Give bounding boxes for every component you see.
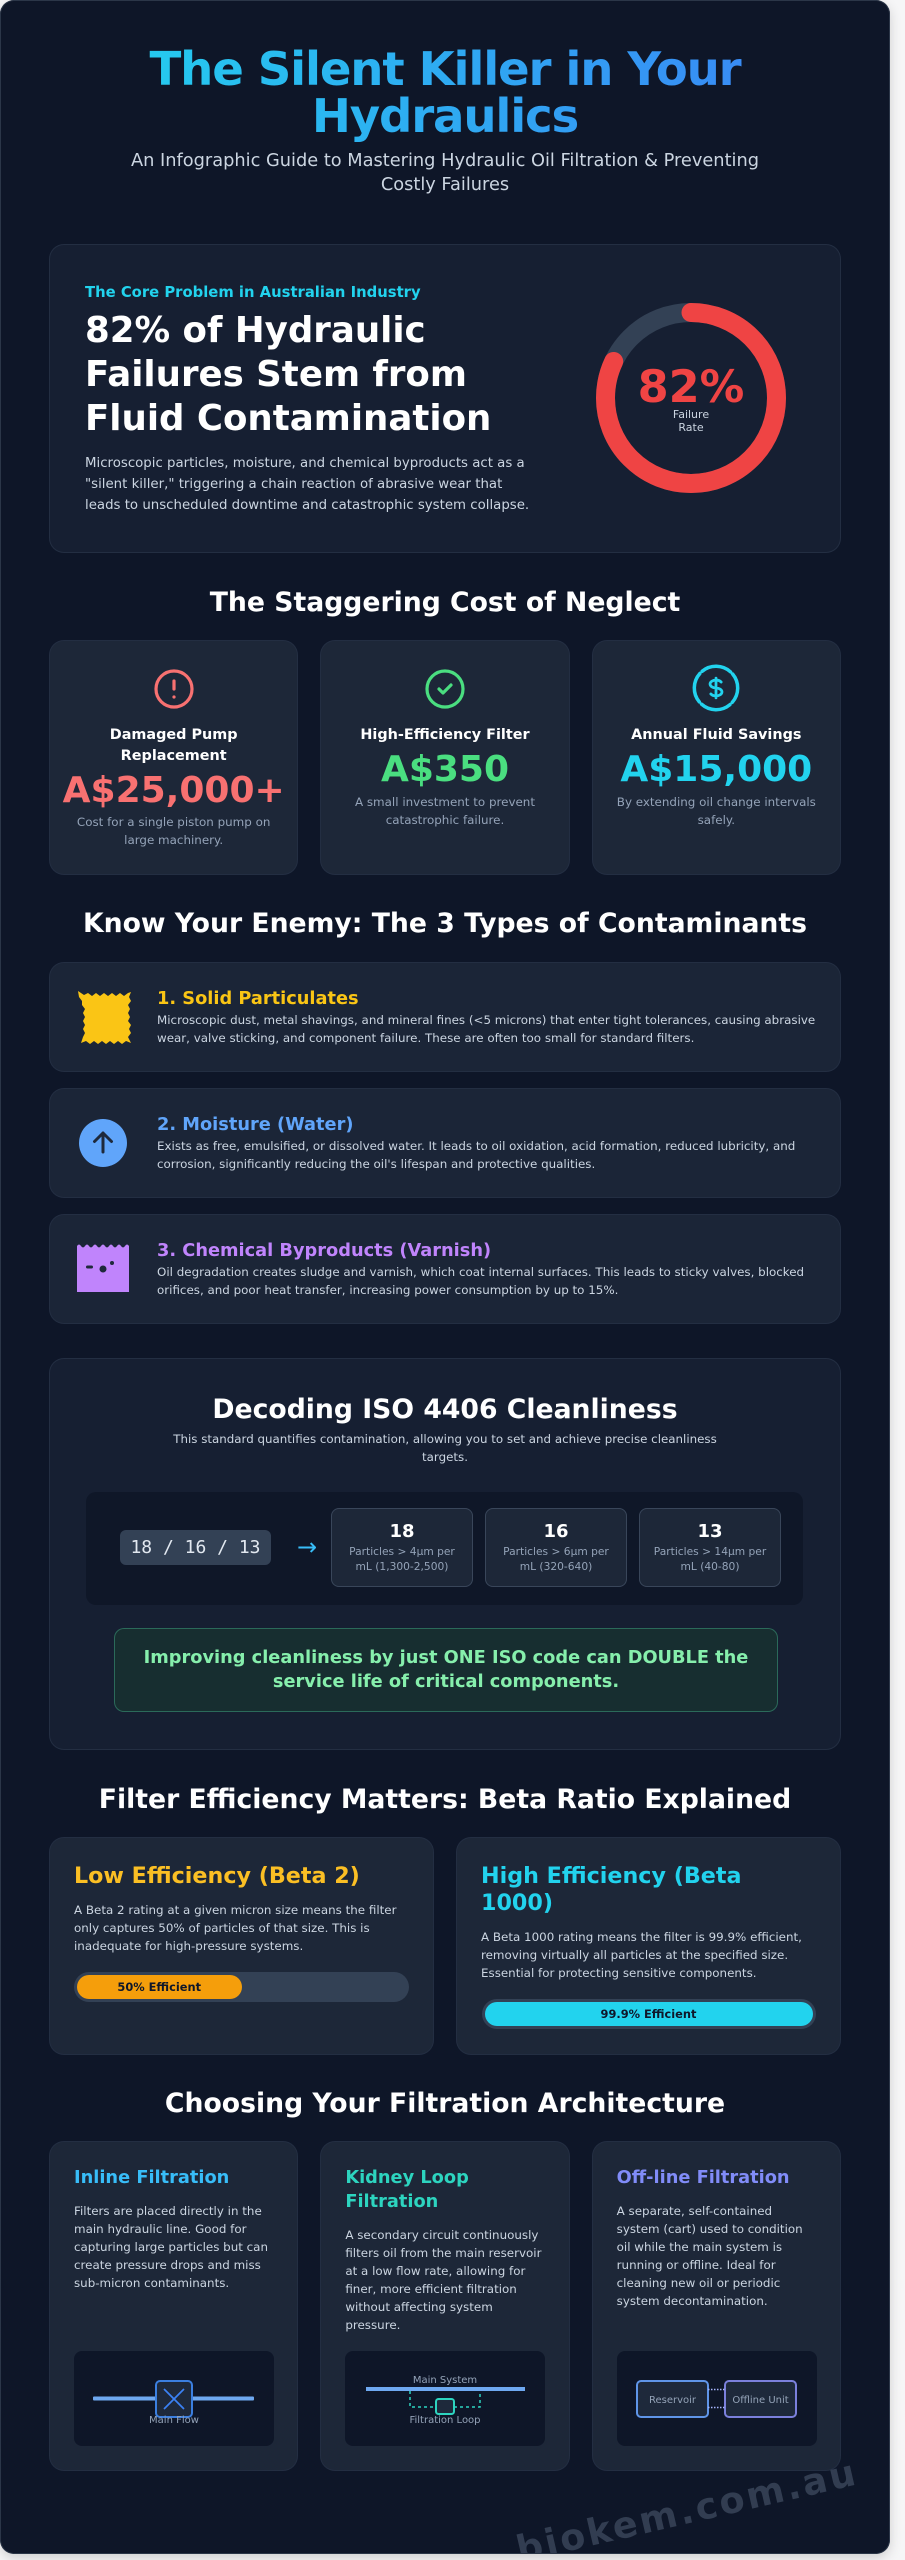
code 18 — [331, 1508, 473, 1587]
card text: cleaning new oil or periodic — [617, 2276, 780, 2290]
item text — [157, 1139, 795, 1171]
label — [349, 1545, 455, 1573]
note — [77, 815, 270, 847]
headline: Fluid Contamination — [85, 398, 491, 439]
label — [654, 1545, 766, 1573]
card text: create pressure drops and miss — [74, 2258, 261, 2272]
card title: Low Efficiency (Beta 2) — [74, 1863, 360, 1889]
panel: kidney loop filtration — [321, 2142, 569, 2470]
note: A small investment to prevent — [355, 795, 535, 809]
heading: Decoding ISO 4406 Cleanliness — [212, 1394, 678, 1425]
number: 16 — [543, 1521, 569, 1542]
code breakdown — [86, 1492, 803, 1605]
description — [85, 456, 529, 513]
card text: A Beta 1000 rating means the filter is 99.9% efficient, — [481, 1930, 802, 1944]
diagram: inline: Main Flow — [149, 2415, 198, 2426]
panel: low efficiency — [50, 1838, 433, 2054]
card text: system (cart) used to condition — [617, 2222, 803, 2236]
value: A$25,000+ — [63, 770, 285, 811]
arrow: → — [297, 1533, 317, 1561]
icon: warning — [154, 669, 194, 709]
heading: beta ratio: Filter Efficiency Matters: Beta Ratio Explained — [99, 1784, 791, 1815]
heading: cost of neglect: The Staggering Cost of Neglect — [210, 587, 680, 618]
item text: wear, valve sticking, and component failure. These are often too small for standard filters. — [157, 1031, 694, 1045]
card text: system decontamination. — [617, 2294, 768, 2308]
diagram: kidney loop: Filtration Loop — [410, 2415, 481, 2426]
note — [355, 795, 535, 827]
card text — [481, 1930, 802, 1980]
card text: only captures 50% of particles of that size. This is — [74, 1921, 370, 1935]
progress bar 99.9% — [482, 1999, 816, 2029]
eyebrow heading: The Core Problem in Australian Industry — [85, 284, 421, 301]
card text — [74, 1903, 396, 1953]
title: The Silent Killer in Your — [149, 43, 740, 97]
card title: High Efficiency (Beta — [481, 1863, 741, 1889]
label: Particles > 14µm per — [654, 1545, 766, 1558]
icon: water — [79, 1119, 127, 1167]
code pill — [120, 1530, 271, 1565]
note: Cost for a single piston pump on — [77, 815, 270, 829]
title: Hydraulics — [312, 90, 578, 144]
item text: orifices, and poor heat transfer, increasing power consumption by up to 15%. — [157, 1283, 618, 1297]
card title — [481, 1863, 741, 1916]
intro text: This standard quantifies contamination, allowing you to set and achieve precise cleanliness — [173, 1432, 717, 1446]
note: By extending oil change intervals — [617, 795, 816, 809]
card title: High-Efficiency Filter — [360, 727, 530, 743]
subtitle: An Infographic Guide to Mastering Hydraulic Oil Filtration & Preventing — [131, 150, 759, 171]
card title: Kidney Loop — [345, 2167, 469, 2188]
item text: corrosion, significantly reducing the oil's lifespan and protective qualities. — [157, 1157, 595, 1171]
label — [503, 1545, 609, 1573]
code pill: 18 / 16 / 13 — [130, 1537, 261, 1558]
label: mL (1,300-2,500) — [356, 1560, 448, 1573]
item text — [157, 1265, 804, 1297]
card title: Inline Filtration — [74, 2167, 229, 2188]
diagram: off-line: Reservoir — [649, 2395, 697, 2406]
note: large machinery. — [124, 833, 223, 847]
panel: ISO 4406 — [50, 1359, 840, 1749]
panel: solid particulates — [50, 963, 840, 1071]
card title: Damaged Pump — [110, 727, 238, 743]
value: A$350 — [381, 749, 509, 790]
card text: at a low flow rate, allowing for — [345, 2264, 525, 2278]
value: A$15,000 — [620, 749, 812, 790]
label: Particles > 6µm per — [503, 1545, 609, 1558]
donut chart: 82% failure rate: 82% — [638, 361, 744, 413]
intro text: targets. — [422, 1450, 468, 1464]
card text: without affecting system — [345, 2300, 493, 2314]
card title: 1000) — [481, 1890, 553, 1916]
label: mL (320-640) — [520, 1560, 592, 1573]
item title: 3. Chemical Byproducts (Varnish) — [157, 1240, 491, 1261]
bar fill — [484, 2002, 812, 2026]
intro text — [173, 1432, 717, 1464]
panel: high efficiency — [457, 1838, 840, 2054]
card title: Filtration — [345, 2191, 438, 2212]
description: leads to unscheduled downtime and catastrophic system collapse. — [85, 498, 529, 513]
card text: filters oil from the main reservoir — [345, 2246, 541, 2260]
headline — [85, 310, 491, 439]
panel: fluid savings — [593, 641, 840, 874]
callout text: service life of critical components. — [273, 1671, 619, 1692]
icon: jagged particle — [78, 991, 131, 1044]
donut chart: 82% failure rate: Failure — [673, 408, 709, 421]
card text: capturing large particles but can — [74, 2240, 268, 2254]
item title: 2. Moisture (Water) — [157, 1114, 353, 1135]
card text: Filters are placed directly in the — [74, 2204, 262, 2218]
heading: architecture: Choosing Your Filtration Architecture — [165, 2088, 725, 2119]
card text: sub-micron contaminants. — [74, 2276, 229, 2290]
callout text — [144, 1647, 748, 1692]
donut chart: 82% failure rate: Rate — [678, 421, 704, 434]
note: catastrophic failure. — [386, 813, 504, 827]
card text: oil while the main system is — [617, 2240, 782, 2254]
diagram: off-line: Offline Unit — [732, 2395, 789, 2406]
diagram: off-line — [617, 2351, 817, 2446]
icon: check — [425, 669, 465, 709]
diagram: kidney loop: Main System — [413, 2375, 478, 2386]
card text: A Beta 2 rating at a given micron size means the filter — [74, 1903, 396, 1917]
note: safely. — [698, 813, 735, 827]
headline: Failures Stem from — [85, 354, 467, 395]
note — [617, 795, 816, 827]
bar fill — [77, 1975, 242, 1999]
card text: pressure. — [345, 2318, 400, 2332]
item text: Microscopic dust, metal shavings, and mineral fines (<5 microns) that enter tight tolerances, causing abrasive — [157, 1013, 815, 1027]
callout — [114, 1628, 778, 1712]
panel: off-line filtration — [593, 2142, 840, 2470]
panel: inline filtration — [50, 2142, 297, 2470]
card title — [110, 727, 238, 764]
item text — [157, 1013, 815, 1045]
number: 18 — [389, 1521, 415, 1542]
card text: inadequate for high-pressure systems. — [74, 1939, 303, 1953]
diagram: kidney loop — [345, 2351, 545, 2446]
item text: Oil degradation creates sludge and varnish, which coat internal surfaces. This leads to sticky valves, blocked — [157, 1265, 804, 1279]
card title — [345, 2167, 469, 2212]
card text: A secondary circuit continuously — [345, 2228, 538, 2242]
item text: Exists as free, emulsified, or dissolved water. It leads to oil oxidation, acid formation, reduced lubricity, and — [157, 1139, 795, 1153]
subtitle — [131, 150, 759, 195]
item title: 1. Solid Particulates — [157, 988, 359, 1009]
number: 13 — [697, 1521, 723, 1542]
heading: contaminants: Know Your Enemy: The 3 Types of Contaminants — [83, 908, 807, 939]
icon: varnish — [77, 1244, 129, 1292]
subtitle: Costly Failures — [381, 174, 509, 195]
title — [50, 47, 840, 149]
description: "silent killer," triggering a chain reaction of abrasive wear that — [85, 477, 502, 492]
headline: 82% of Hydraulic — [85, 310, 426, 351]
card title: Off-line Filtration — [617, 2167, 790, 2188]
panel: moisture — [50, 1089, 840, 1197]
panel: chemical byproducts — [50, 1215, 840, 1323]
panel: core problem — [50, 245, 840, 552]
card text — [345, 2228, 542, 2332]
label: Particles > 4µm per — [349, 1545, 455, 1558]
card text: main hydraulic line. Good for — [74, 2222, 246, 2236]
panel: filter cost — [321, 641, 569, 874]
card title: Annual Fluid Savings — [631, 727, 801, 743]
donut chart: 82% failure rate — [596, 303, 786, 493]
card title: Replacement — [121, 748, 227, 764]
card text: removing virtually all particles at the specified size. — [481, 1948, 788, 1962]
card text: A separate, self-contained — [617, 2204, 772, 2218]
label: mL (40-80) — [680, 1560, 739, 1573]
code 13 — [639, 1508, 781, 1587]
callout text: Improving cleanliness by just ONE ISO code can DOUBLE the — [144, 1647, 748, 1668]
bar fill: 99.9% Efficient — [601, 2007, 696, 2021]
card text: finer, more efficient filtration — [345, 2282, 517, 2296]
card text — [74, 2204, 268, 2290]
panel: pump replacement cost — [50, 641, 297, 874]
card text — [616, 2204, 803, 2308]
description: Microscopic particles, moisture, and chemical byproducts act as a — [85, 456, 525, 471]
progress bar 50% — [74, 1972, 409, 2002]
icon: dollar — [692, 664, 740, 712]
bar fill: 50% Efficient — [117, 1980, 201, 1994]
code 16 — [485, 1508, 627, 1587]
card text: running or offline. Ideal for — [617, 2258, 776, 2272]
card text: Essential for protecting sensitive components. — [481, 1966, 757, 1980]
diagram: inline — [74, 2351, 274, 2446]
